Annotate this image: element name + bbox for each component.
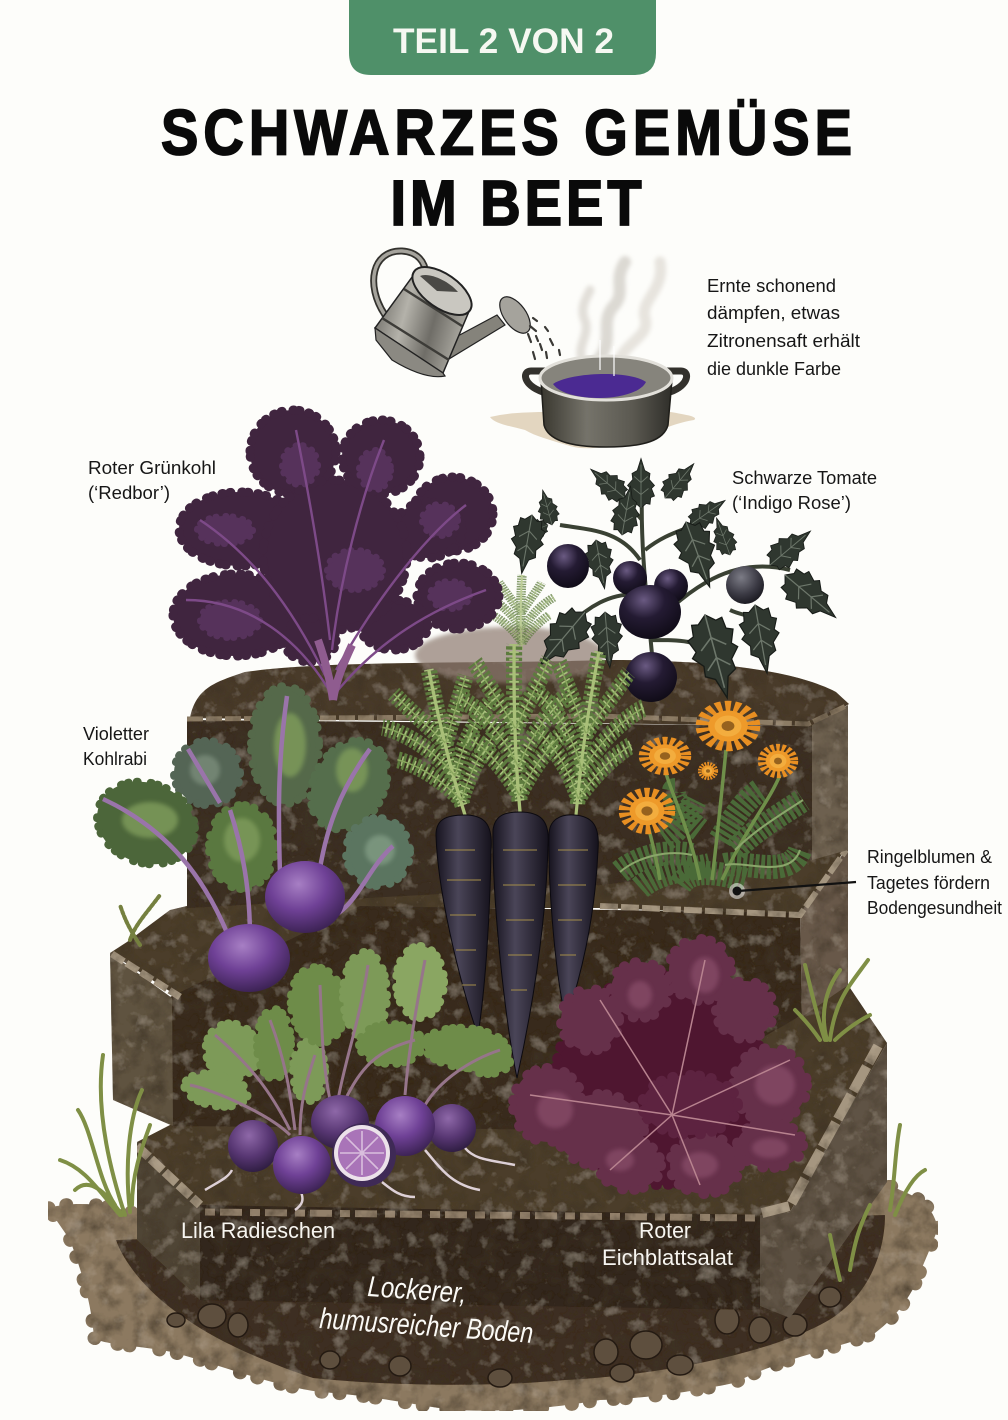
plant: black tomato <box>506 456 847 704</box>
label: violet kohlrabi: Violetter <box>83 723 149 744</box>
label: violet kohlrabi: Kohlrabi <box>83 748 147 769</box>
text: steaming tip <box>707 275 861 379</box>
plant: violet kohlrabi <box>85 686 410 992</box>
label: loose humus-rich soil <box>319 1271 534 1350</box>
raised bed: top tier <box>187 660 849 908</box>
label: red kale: (‘Redbor’) <box>88 482 170 503</box>
badge: part 2 of 2: TEIL 2 VON 2 <box>393 22 614 61</box>
text: steaming tip: die dunkle Farbe <box>707 358 841 379</box>
label: red kale <box>88 457 216 503</box>
grass tufts <box>60 895 925 1280</box>
callout: marigolds label with leader line: Ringelblumen & <box>867 846 993 867</box>
callout: marigolds label with leader line: Tagetes fördern <box>867 872 990 893</box>
label: black tomato: Schwarze Tomate <box>732 467 877 488</box>
soil clutter behind carrots <box>415 575 605 683</box>
plant: black carrots <box>372 642 651 1078</box>
title: SCHWARZES GEMÜSE <box>161 97 857 168</box>
title: IM BEET <box>390 168 646 239</box>
label: red oak-leaf lettuce: Roter <box>639 1218 691 1243</box>
ground soil spread <box>48 1180 938 1411</box>
icon: watering can <box>374 251 560 377</box>
label: loose humus-rich soil: Lockerer, <box>367 1271 468 1310</box>
icon: steaming pot <box>490 262 695 448</box>
raised bed: middle tier <box>110 845 848 1130</box>
label: violet kohlrabi <box>83 723 149 769</box>
label: red oak-leaf lettuce: Eichblattsalat <box>602 1245 733 1270</box>
callout: marigolds label with leader line: Bodengesundheit <box>867 897 1003 918</box>
label: loose humus-rich soil: humusreicher Boden <box>319 1303 534 1350</box>
plant: purple radishes <box>182 946 515 1210</box>
label: black tomato <box>732 467 877 513</box>
text: steaming tip: Ernte schonend <box>707 275 836 296</box>
callout: marigolds label with leader line <box>729 846 1003 918</box>
text: steaming tip: dämpfen, etwas <box>707 302 840 323</box>
plant: marigolds <box>620 706 803 888</box>
label: black tomato: (‘Indigo Rose’) <box>732 492 851 513</box>
plant: red oak-leaf lettuce <box>513 939 807 1194</box>
plant: red kale <box>173 410 499 700</box>
label: red oak-leaf lettuce <box>602 1218 733 1270</box>
raised bed: bottom tier <box>137 985 887 1318</box>
title <box>161 97 857 239</box>
text: steaming tip: Zitronensaft erhält <box>707 330 861 351</box>
badge: part 2 of 2 <box>349 0 656 75</box>
label: red kale: Roter Grünkohl <box>88 457 216 478</box>
label: purple radishes: Lila Radieschen <box>181 1218 335 1243</box>
